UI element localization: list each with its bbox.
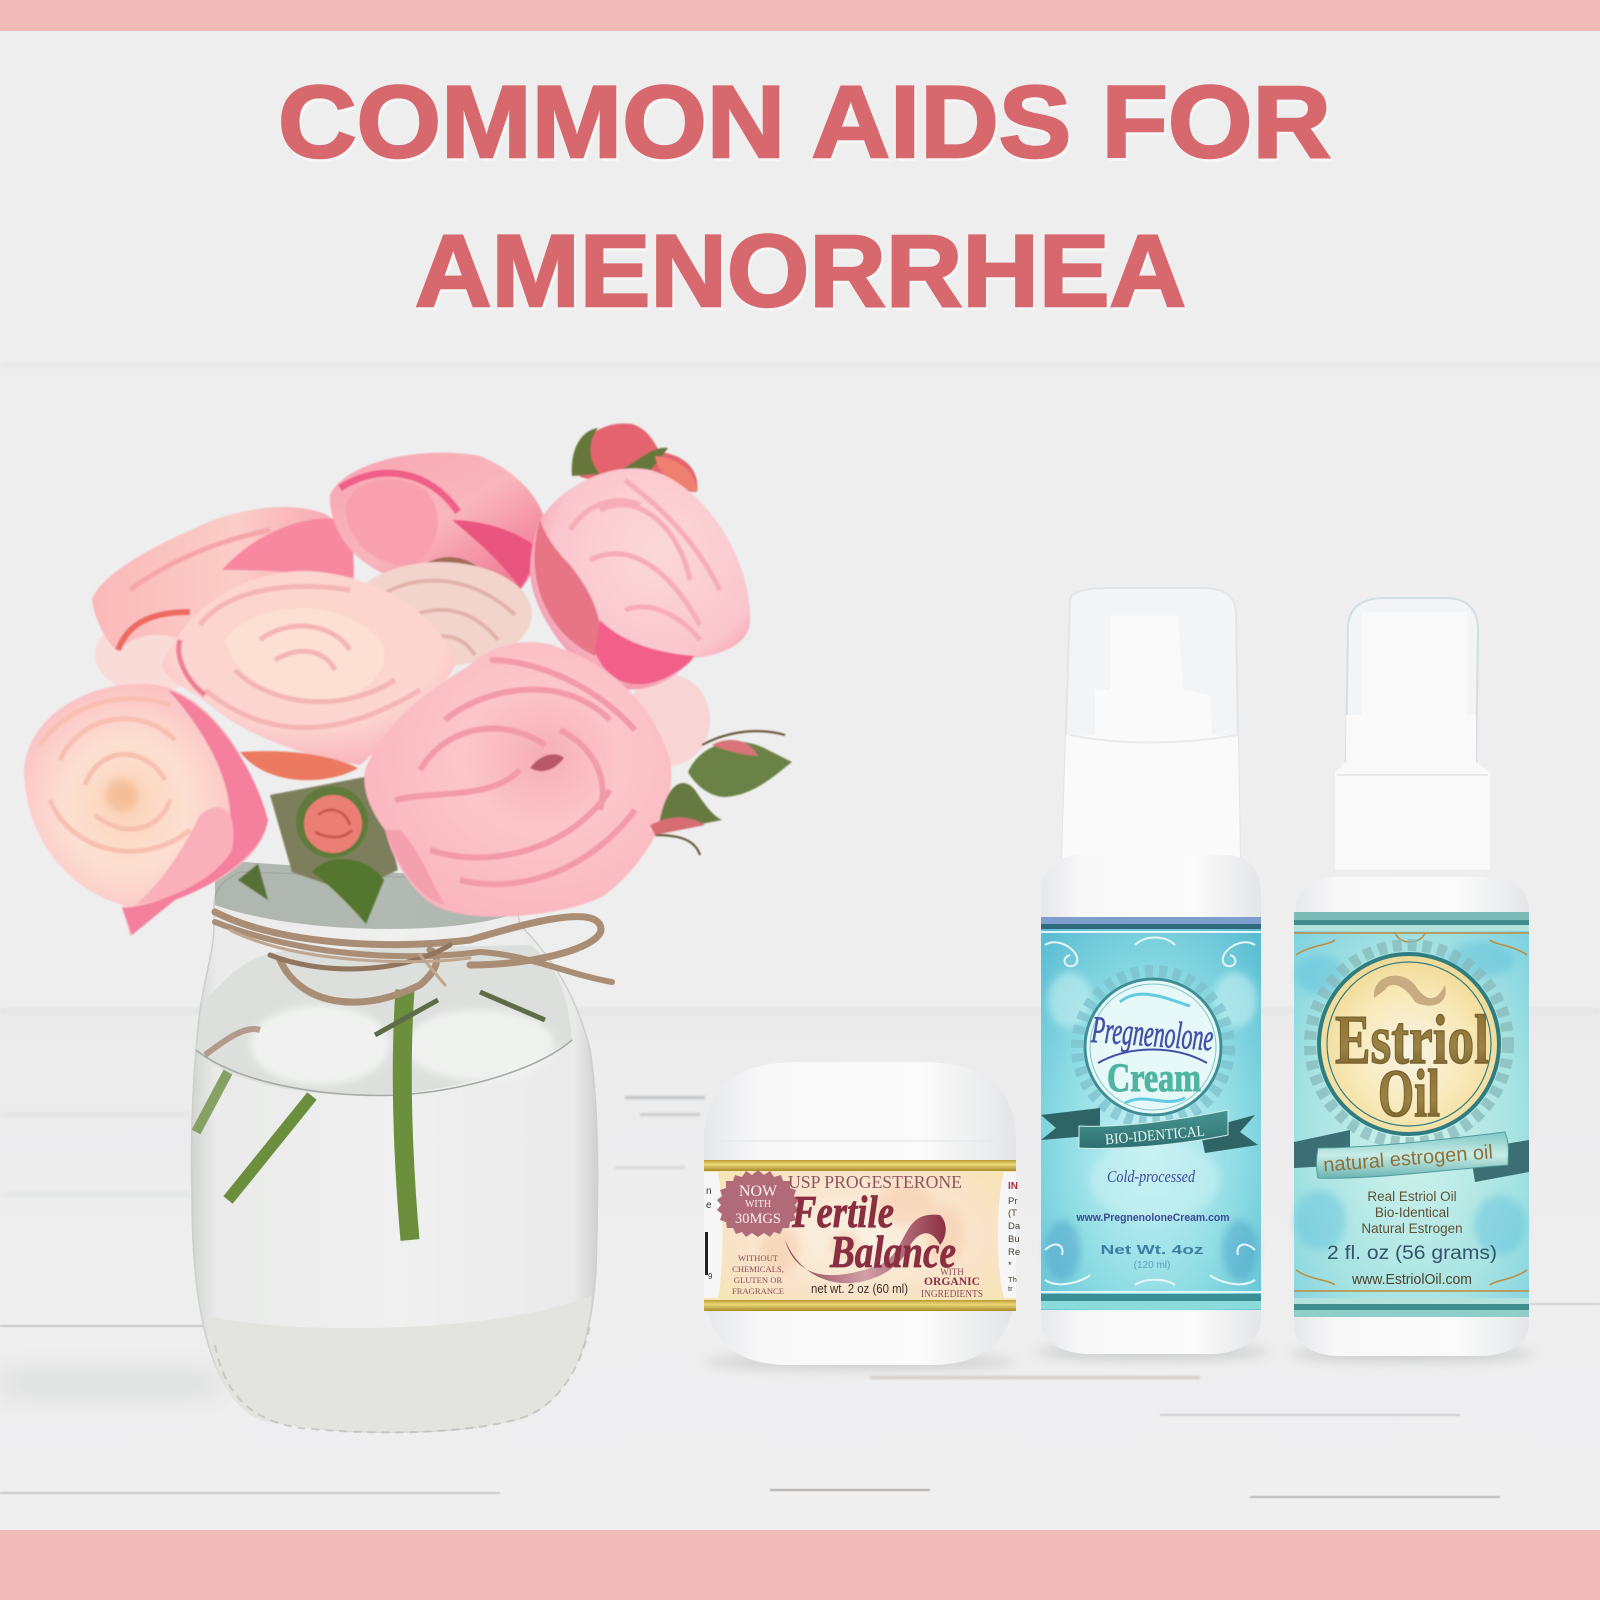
bottle label: www.EstriolOil.com <box>1351 1271 1472 1288</box>
bottle label: Pregnenolone <box>1090 1009 1215 1059</box>
jar label: FRAGRANCE <box>732 1286 784 1296</box>
rose bouquet <box>24 423 792 936</box>
jar label: GLUTEN OR <box>734 1275 782 1285</box>
center top pale rose <box>162 571 456 780</box>
center bud and sepals <box>238 786 384 924</box>
jar label: Fertile <box>791 1186 894 1237</box>
jar label: WITH <box>940 1267 964 1277</box>
title: AMENORRHEA <box>417 217 1188 331</box>
flower stems in vase <box>196 990 545 1240</box>
starburst badge <box>717 1170 799 1237</box>
foliage and shadow behind roses <box>270 775 398 892</box>
bottle label <box>1041 917 1261 1310</box>
bottle label: BIO-IDENTICAL <box>1104 1124 1206 1148</box>
bottle label: Natural Estrogen <box>1361 1221 1463 1236</box>
jar label: Pr <box>1008 1196 1018 1207</box>
back center pale rose <box>348 562 532 666</box>
jar label: e <box>706 1200 712 1211</box>
jar label: Re <box>1008 1247 1020 1258</box>
lower left pale rose <box>95 617 205 693</box>
twine bow <box>215 912 612 1002</box>
jar label: Da <box>1008 1221 1021 1232</box>
jar label: tr <box>1008 1284 1013 1293</box>
front center large rose <box>364 642 671 917</box>
jar label: Th <box>1008 1275 1017 1284</box>
medallion <box>1319 954 1499 1134</box>
bottle label: Estriol <box>1335 1002 1489 1079</box>
bottle label: Real Estriol Oil <box>1367 1189 1457 1204</box>
jar label: n <box>706 1186 712 1197</box>
bottle label: Net Wt. 4oz <box>1100 1242 1204 1257</box>
pump cap <box>1062 588 1240 860</box>
bottle label: Cream <box>1107 1055 1201 1100</box>
bottle label: natural estrogen oil <box>1322 1141 1494 1177</box>
product: Fertile Balance progesterone jar <box>704 1062 1021 1369</box>
jar label <box>704 1160 1021 1311</box>
product: Estriol Oil spray bottle <box>1290 598 1534 1361</box>
jar label: NOW <box>739 1183 778 1200</box>
back top dark pink rose <box>330 453 546 590</box>
jar label: (T <box>1008 1208 1017 1219</box>
right top rose <box>530 468 750 690</box>
back left rose <box>92 507 354 652</box>
title <box>278 65 1333 331</box>
jar label: net wt. 2 oz (60 ml) <box>811 1282 908 1296</box>
jar lid and base <box>704 1062 1016 1365</box>
title: COMMON AIDS FOR <box>280 68 1333 182</box>
wreath <box>1310 945 1508 1143</box>
right back pale rose <box>626 674 710 766</box>
jar label: 9 <box>708 1272 713 1281</box>
jar label: WITH <box>745 1199 771 1210</box>
spray cap <box>1335 598 1490 870</box>
jar label: IN <box>1008 1181 1018 1192</box>
title: AMENORRHEA <box>415 214 1186 328</box>
title: COMMON AIDS FOR <box>278 65 1331 179</box>
jar label: * <box>1008 1260 1012 1271</box>
bottom pink band <box>0 1530 1600 1600</box>
top pink band <box>0 0 1600 31</box>
left large rose <box>24 684 268 936</box>
jar label: CHEMICALS, <box>732 1264 784 1274</box>
top bud <box>572 423 697 492</box>
jar label: Balance <box>829 1226 956 1277</box>
bottle label: Bio-Identical <box>1375 1205 1449 1220</box>
bottle label: Cold-processed <box>1107 1167 1195 1186</box>
right side buds <box>650 731 792 855</box>
ribbon banner <box>1294 1130 1529 1182</box>
bottle label: Oil <box>1378 1055 1440 1131</box>
bottle label: 2 fl. oz (56 grams) <box>1327 1243 1497 1264</box>
jar label: INGREDIENTS <box>921 1289 983 1300</box>
product: Pregnenolone Cream pump bottle <box>1034 588 1270 1359</box>
medallion <box>1085 979 1221 1115</box>
ribbon banner <box>1041 1108 1258 1153</box>
bottle label: www.PregnenoloneCream.com <box>1076 1212 1230 1224</box>
jar label: ORGANIC <box>924 1274 980 1288</box>
jar label: WITHOUT <box>738 1253 779 1263</box>
bottle body <box>1294 877 1529 1356</box>
wreath <box>1077 971 1229 1123</box>
jar label: 30MGS <box>735 1211 781 1227</box>
jar label: USP PROGESTERONE <box>788 1172 962 1192</box>
bottle label: (120 ml) <box>1134 1260 1170 1271</box>
jar label: Bu <box>1008 1234 1020 1245</box>
bottle label <box>1294 912 1529 1317</box>
glass vase with water <box>191 860 598 1432</box>
bottle body <box>1041 855 1261 1354</box>
